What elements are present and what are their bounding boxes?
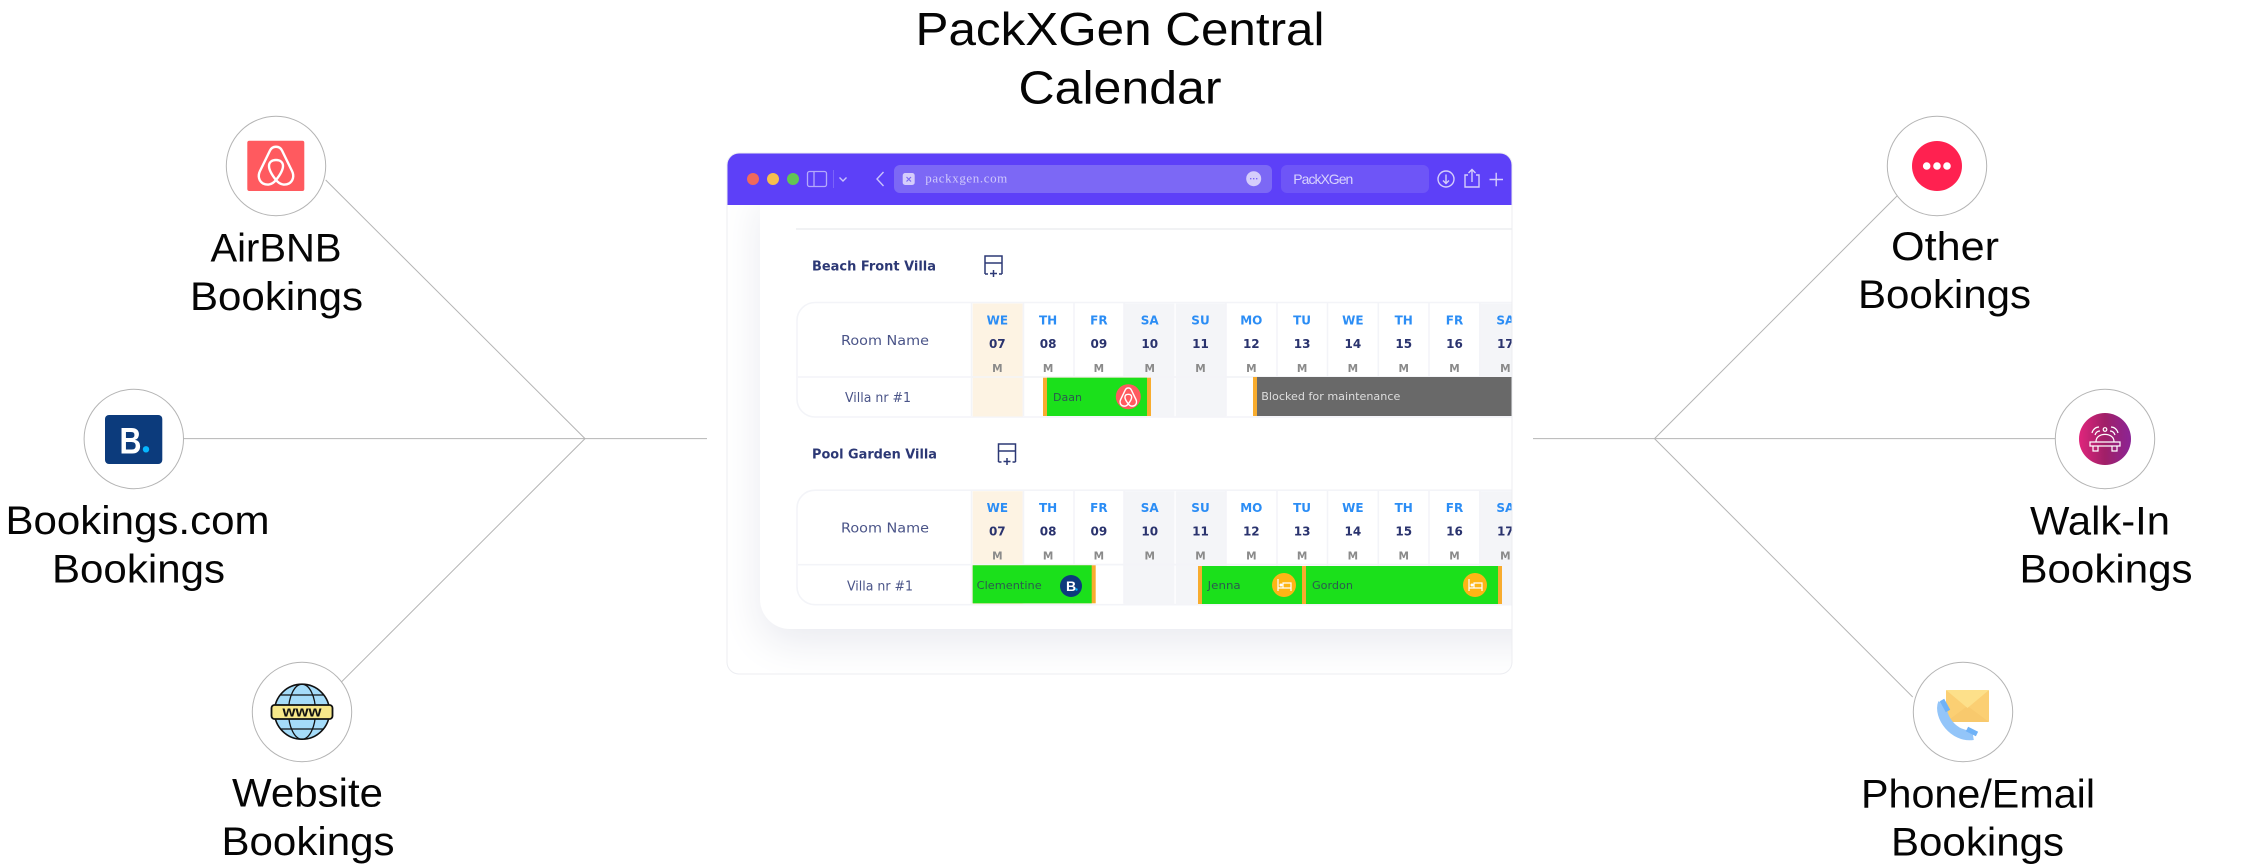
label: Walk-In Bookings: Walk-In (2030, 500, 2170, 544)
calendar table: Beach Front Villa: M (1246, 363, 1257, 375)
heading: Beach Front Villa: Beach Front Villa (812, 260, 936, 274)
calendar table: Beach Front Villa: TH (1039, 314, 1057, 328)
icon: www globe: www (281, 704, 322, 721)
calendar table: Pool Garden Villa: SA (1496, 501, 1515, 515)
calendar table: Beach Front Villa: M (1297, 363, 1307, 375)
calendar table: Beach Front Villa: M (1348, 363, 1358, 375)
booking bar: Clementine (973, 565, 1096, 603)
source: Bookings.com (6, 389, 270, 591)
label: Phone/Email Bookings: Bookings (1891, 820, 2064, 864)
label: Other Bookings (1858, 225, 2031, 317)
calendar table: Pool Garden Villa: M (1449, 551, 1460, 563)
calendar table: Beach Front Villa: SA (1141, 314, 1159, 328)
browser window outline (727, 153, 1512, 674)
calendar table: Beach Front Villa: WE (987, 314, 1008, 328)
calendar table: Beach Front Villa: M (1043, 363, 1053, 375)
calendar table: Beach Front Villa: 16 (1446, 337, 1463, 351)
calendar table: Pool Garden Villa: Villa nr #1 (847, 580, 913, 595)
source: Other (1858, 116, 2031, 317)
calendar table: Beach Front Villa: Room Name (841, 334, 929, 349)
label: AirBNB Bookings: Bookings (190, 275, 363, 319)
label: Bookings.com Bookings: Bookings.com (6, 499, 270, 543)
calendar table: Beach Front Villa: TU (1293, 314, 1311, 328)
label: Bookings.com Bookings: Bookings (52, 547, 225, 591)
icon: booking.com logo (105, 415, 162, 464)
icon: add room (998, 444, 1016, 465)
calendar table: Beach Front Villa: 14 (1345, 337, 1361, 351)
calendar table: Pool Garden Villa: M (1500, 551, 1511, 563)
calendar table: Pool Garden Villa: WE (1342, 501, 1364, 515)
tab: PackXGen (1281, 165, 1429, 193)
calendar table: Beach Front Villa: M (992, 363, 1003, 375)
label: Other Bookings: Bookings (1858, 273, 2031, 317)
calendar table: Beach Front Villa: 09 (1091, 337, 1107, 351)
icon: reception bell (2079, 413, 2131, 465)
calendar table: Beach Front Villa: 13 (1294, 337, 1310, 351)
icon: envelope and phone (1942, 690, 1989, 735)
calendar table: Pool Garden Villa: M (1297, 551, 1307, 563)
label: AirBNB Bookings: AirBNB (210, 227, 342, 271)
calendar table: Pool Garden Villa: 13 (1294, 525, 1310, 539)
calendar table: Pool Garden Villa: FR (1446, 501, 1463, 515)
label: Bookings.com Bookings (6, 499, 270, 591)
title: Calendar (1018, 61, 1222, 113)
connector lines: right booking sources (1533, 195, 2055, 697)
calendar table: Beach Front Villa: 10 (1141, 337, 1158, 351)
calendar table: Pool Garden Villa: 17 (1497, 525, 1514, 539)
calendar table: Beach Front Villa: 17 (1497, 337, 1514, 351)
calendar table: Pool Garden Villa: SA (1141, 501, 1159, 515)
calendar table: Pool Garden Villa: 08 (1040, 525, 1056, 539)
calendar table: Pool Garden Villa: M (1144, 551, 1155, 563)
icon: three dots (1912, 141, 1962, 191)
connector lines: left booking sources (184, 180, 707, 683)
calendar table: Beach Front Villa: 08 (1040, 337, 1056, 351)
panel: browser window with calendar (728, 154, 1512, 648)
calendar table: Pool Garden Villa: M (1195, 551, 1206, 563)
calendar table: Beach Front Villa: 07 (989, 337, 1006, 351)
booking bar: Jenna: Jenna (1207, 579, 1241, 592)
calendar table: Beach Front Villa: WE (1342, 314, 1364, 328)
calendar table: Beach Front Villa: M (1500, 363, 1511, 375)
label: Phone/Email Bookings (1861, 772, 2095, 864)
calendar table: Pool Garden Villa: 10 (1141, 525, 1158, 539)
calendar table: Beach Front Villa: FR (1446, 314, 1463, 328)
calendar table: Pool Garden Villa: SU (1191, 501, 1210, 515)
label: Walk-In Bookings (2020, 500, 2192, 591)
source: AirBNB (190, 116, 363, 319)
toolbar icons (1438, 170, 1503, 187)
booking bar: Clementine: Clementine (977, 579, 1042, 592)
calendar table: Beach Front Villa: SU (1191, 314, 1210, 328)
calendar table: Pool Garden Villa (797, 490, 1557, 605)
label: Other Bookings: Other (1891, 225, 1999, 269)
calendar table: Pool Garden Villa: FR (1090, 501, 1108, 515)
booking bar: Blocked for maintenance: Blocked for maintenance (1261, 390, 1401, 403)
calendar table: Beach Front Villa: M (1094, 363, 1104, 375)
calendar table: Beach Front Villa: SA (1496, 314, 1515, 328)
heading: Pool Garden Villa: Pool Garden Villa (812, 448, 937, 462)
booking bar: Clementine: B (1066, 578, 1076, 594)
calendar table: Pool Garden Villa: TU (1293, 501, 1311, 515)
calendar table: Pool Garden Villa: M (1348, 551, 1358, 563)
label: Website Bookings: Website (232, 772, 383, 816)
icon: airbnb logo (247, 141, 304, 191)
booking bar: Daan: Daan (1053, 391, 1082, 404)
calendar table: Beach Front Villa: TH (1395, 314, 1413, 328)
calendar table: Pool Garden Villa: TH (1395, 501, 1413, 515)
calendar table: Beach Front Villa: FR (1090, 314, 1108, 328)
calendar table: Pool Garden Villa: 09 (1091, 525, 1107, 539)
calendar table: Pool Garden Villa: 11 (1192, 525, 1209, 539)
booking bar: Blocked for maintenance (1253, 377, 1512, 416)
calendar table: Pool Garden Villa: 14 (1345, 525, 1361, 539)
calendar table: Pool Garden Villa: M (1043, 551, 1053, 563)
calendar table: Beach Front Villa: Villa nr #1 (845, 391, 911, 406)
booking bar: Jenna (1198, 566, 1306, 604)
calendar table: Beach Front Villa (797, 302, 1557, 417)
calendar table: Beach Front Villa: M (1144, 363, 1155, 375)
calendar table: Beach Front Villa: M (1195, 363, 1206, 375)
booking bar: Gordon (1302, 566, 1502, 604)
title (916, 3, 1324, 113)
calendar table: Beach Front Villa: M (1398, 363, 1409, 375)
icon: add room (985, 256, 1002, 277)
title: PackXGen Central (916, 3, 1324, 55)
source: Walk-In (2020, 389, 2192, 591)
booking bar: Daan (1043, 378, 1151, 416)
calendar table: Pool Garden Villa: MO (1240, 501, 1262, 515)
label: Walk-In Bookings: Bookings (2020, 547, 2192, 591)
icon: booking.com logo: B (120, 420, 142, 461)
calendar table: Pool Garden Villa: Room Name (841, 522, 929, 537)
source: Website (222, 662, 394, 864)
calendar table: Beach Front Villa: 15 (1395, 337, 1412, 351)
calendar table: Pool Garden Villa: 07 (989, 525, 1006, 539)
label: AirBNB Bookings (190, 227, 363, 319)
calendar table: Beach Front Villa: 12 (1243, 337, 1260, 351)
browser toolbar (727, 153, 1512, 205)
calendar table: Beach Front Villa: M (1449, 363, 1460, 375)
calendar table: Pool Garden Villa: 15 (1395, 525, 1412, 539)
calendar table: Pool Garden Villa: WE (987, 501, 1008, 515)
calendar table: Pool Garden Villa: TH (1039, 501, 1057, 515)
tab: PackXGen: PackXGen (1293, 171, 1353, 187)
address bar: packxgen.com (925, 170, 1007, 186)
calendar table: Beach Front Villa: MO (1240, 314, 1262, 328)
calendar table: Pool Garden Villa: 12 (1243, 525, 1260, 539)
calendar table: Beach Front Villa: 11 (1192, 337, 1209, 351)
label: Website Bookings (222, 772, 394, 864)
booking bar: Gordon: Gordon (1312, 579, 1353, 592)
icon: www globe (272, 684, 332, 739)
label: Phone/Email Bookings: Phone/Email (1861, 772, 2095, 816)
calendar table: Pool Garden Villa: M (1246, 551, 1257, 563)
source: Phone/Email (1861, 662, 2095, 864)
calendar table: Pool Garden Villa: M (992, 551, 1003, 563)
calendar table: Pool Garden Villa: M (1094, 551, 1104, 563)
label: Website Bookings: Bookings (222, 820, 394, 864)
calendar table: Pool Garden Villa: 16 (1446, 525, 1463, 539)
calendar table: Pool Garden Villa: M (1398, 551, 1409, 563)
address bar (894, 165, 1272, 193)
